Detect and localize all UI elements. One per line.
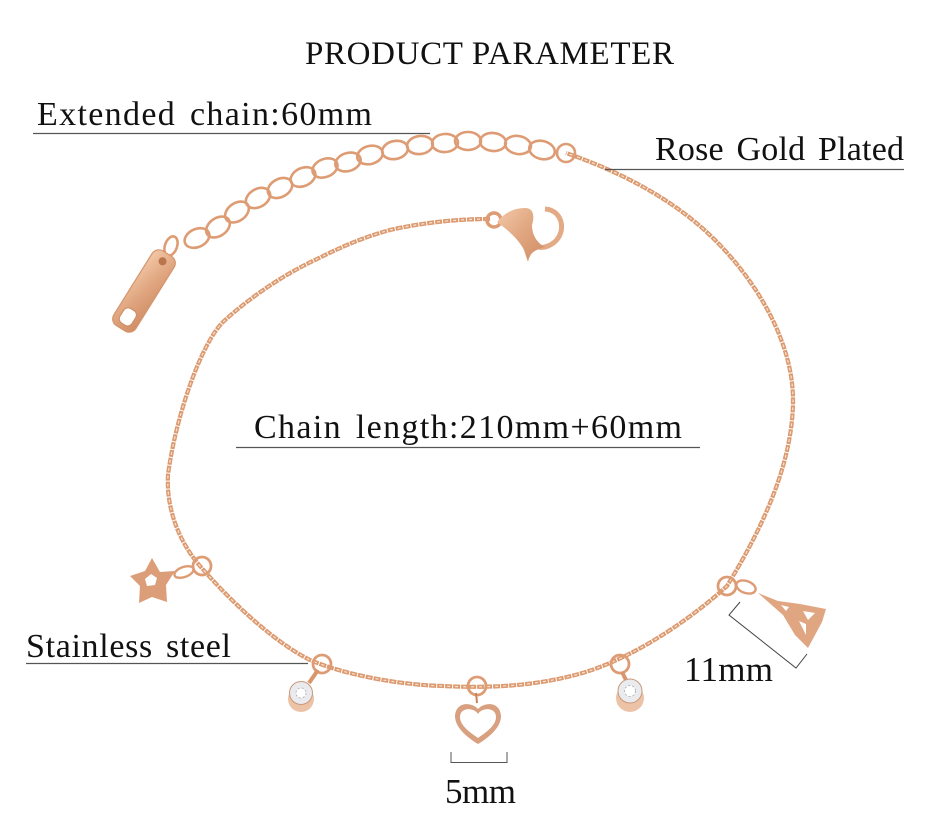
charm: crystal left	[288, 655, 331, 712]
dimension: heart 5mm: 5mm	[445, 772, 516, 811]
lobster clasp	[487, 208, 562, 262]
dimension: tower 11mm	[684, 602, 807, 689]
label: rose gold plated: Rose Gold Plated	[655, 131, 904, 168]
dimension: tower 11mm: 11mm	[684, 650, 773, 689]
main bracelet chain	[168, 153, 793, 687]
extended chain	[162, 132, 575, 257]
extender end tag	[110, 247, 178, 335]
charm: star	[130, 557, 211, 603]
title: PRODUCT PARAMETER	[305, 36, 674, 72]
charm: crystal right	[611, 655, 644, 712]
label: chain length: Chain length:210mm+60mm	[254, 409, 682, 446]
dimension: heart 5mm	[445, 752, 516, 811]
label: stainless steel: Stainless steel	[26, 628, 231, 665]
charm: tower	[718, 577, 826, 648]
charm: heart	[455, 677, 501, 744]
label: extended chain: Extended chain:60mm	[37, 96, 372, 133]
